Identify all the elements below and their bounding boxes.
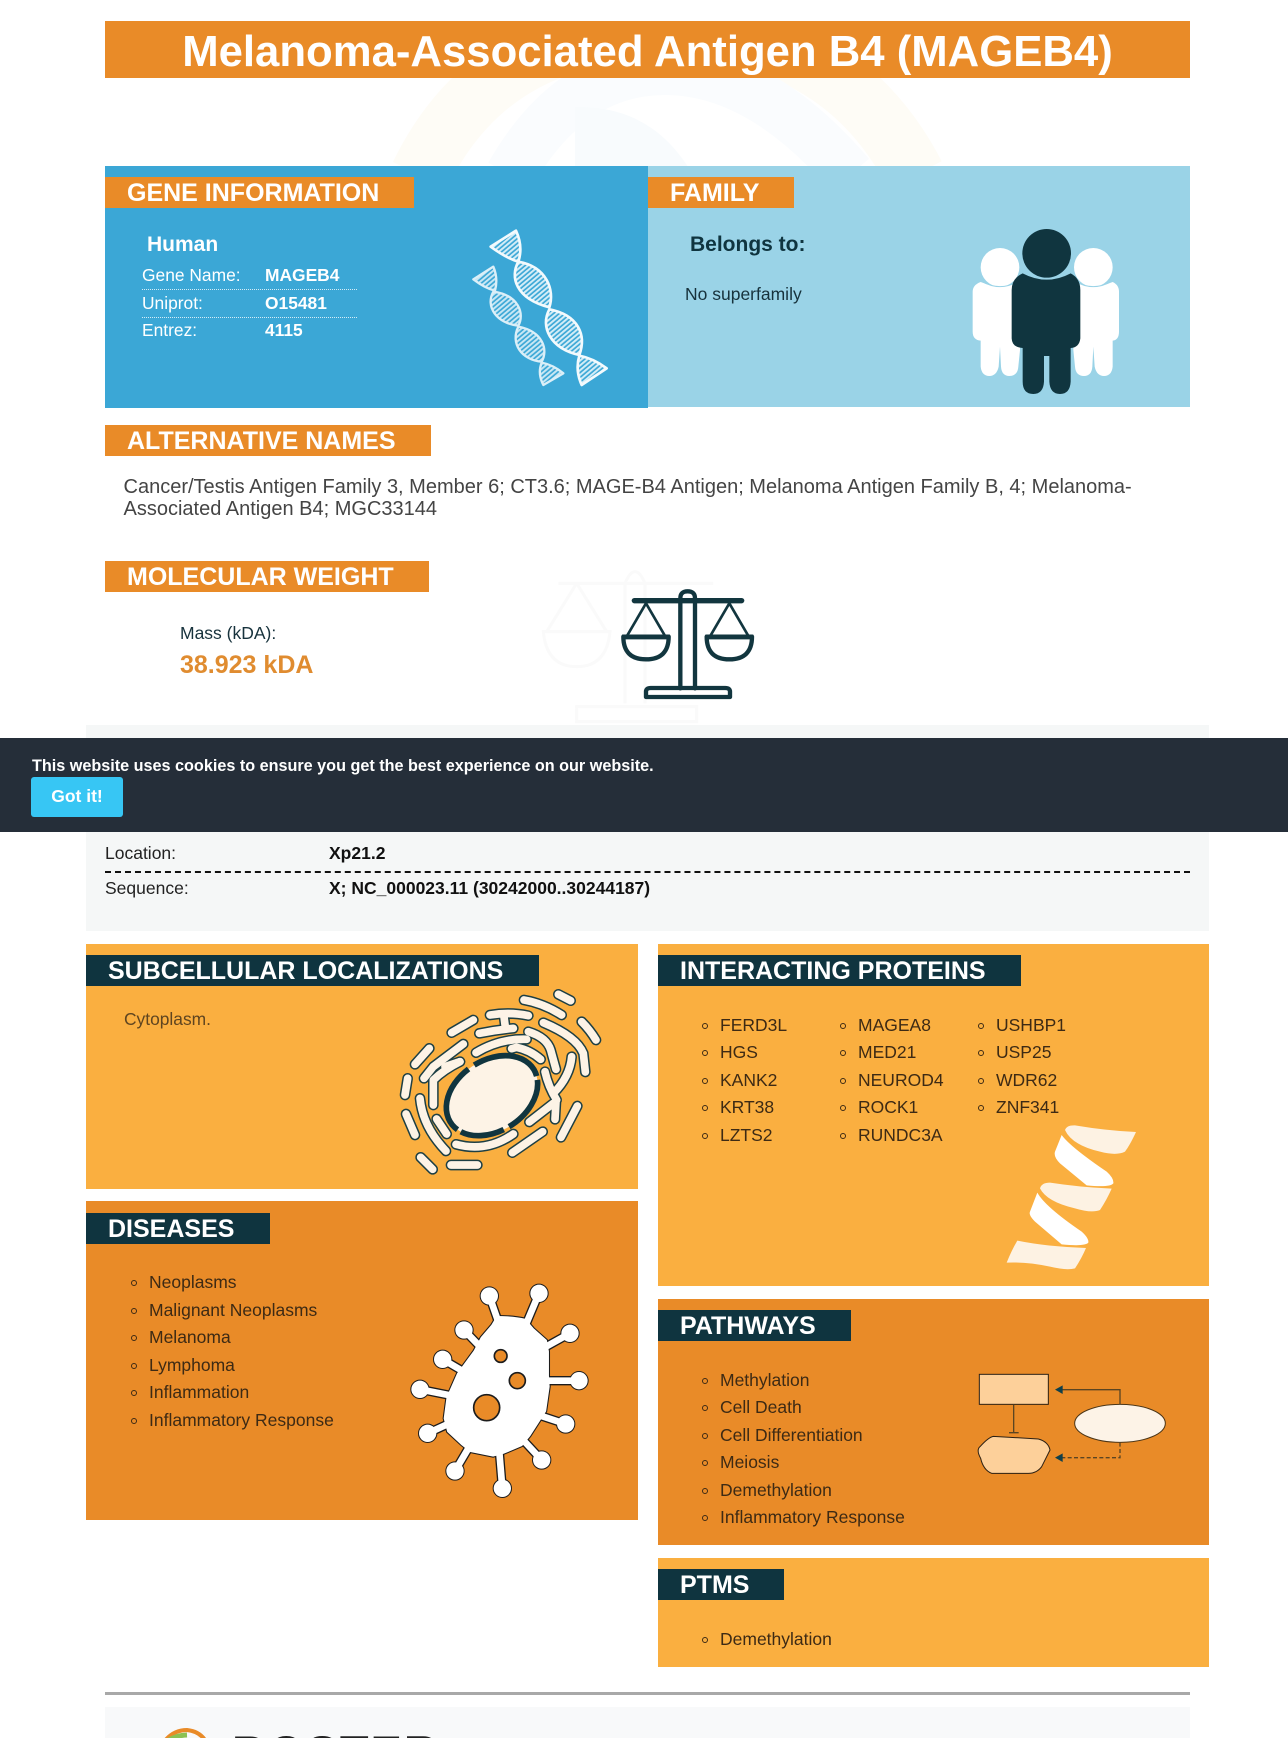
panel: gene information [105,166,648,408]
panel: interacting proteins [658,944,1209,1286]
faint watermark scales [520,560,780,730]
heading: family: FAMILY [670,179,759,207]
list: proteins column 2 [840,1015,944,1145]
heading: ptms: PTMS [680,1571,749,1599]
list: proteins column 1 [702,1015,787,1145]
list: pathways: Cell Death [720,1397,802,1417]
sequence value: X; NC_000023.11 (30242000..30244187) [329,878,650,898]
list: ptms: Demethylation [720,1629,832,1649]
heading: diseases: DISEASES [108,1215,234,1243]
heading: interacting proteins: INTERACTING PROTEINS [680,957,986,985]
list: diseases: Malignant Neoplasms [149,1300,317,1320]
list: pathways: Meiosis [720,1452,779,1472]
icon: pathway diagram [978,1374,1166,1474]
list: proteins column 3: WDR62 [996,1070,1057,1090]
panel: footer [105,1707,1190,1738]
mass label: Mass (kDA): [180,623,276,643]
heading: gene information: GENE INFORMATION [127,179,379,207]
panel: pathways [658,1299,1209,1545]
entrez row [142,320,303,340]
species label: Human [147,233,218,256]
background watermark logo [394,78,941,166]
localization text: Cytoplasm. [124,1009,211,1029]
heading: pathways: PATHWAYS [680,1312,816,1340]
list: pathways: Demethylation [720,1480,832,1500]
title banner: Melanoma-Associated Antigen B4 (MAGEB4) [182,27,1113,76]
panel: diseases [86,1201,638,1520]
belongs to label: Belongs to: [690,233,806,256]
list: diseases: Inflammation [149,1382,249,1402]
panel: ptms [658,1558,1209,1667]
superfamily value: No superfamily [685,284,802,304]
list: proteins column 2: MAGEA8 [858,1015,931,1035]
list: proteins column 2: NEUROD4 [858,1070,944,1090]
panel: subcellular localizations [86,944,638,1189]
entrez row: Entrez: [142,320,197,340]
uniprot row: O15481 [265,293,327,313]
heading: molecular weight: MOLECULAR WEIGHT [127,563,394,591]
list: proteins column 3: USP25 [996,1042,1051,1062]
got it button: Got it! [51,786,103,806]
list: proteins column 2: MED21 [858,1042,916,1062]
heading: ptms [658,1569,784,1600]
heading: subcellular localizations: SUBCELLULAR LOCALIZATIONS [108,957,503,985]
list: proteins column 1: KANK2 [720,1070,777,1090]
cookie message: This website uses cookies to ensure you get the best experience on our website. [32,757,654,775]
uniprot row: Uniprot: [142,293,203,313]
list: pathways [702,1370,905,1527]
list: proteins column 3: ZNF341 [996,1097,1059,1117]
list: pathways: Inflammatory Response [720,1507,905,1527]
panel: family [648,166,1190,407]
list: diseases: Neoplasms [149,1272,237,1292]
list: proteins column 2: ROCK1 [858,1097,918,1117]
icon: people group [972,229,1119,394]
list: pathways: Cell Differentiation [720,1425,863,1445]
location value: Xp21.2 [329,843,385,863]
list: proteins column 1: KRT38 [720,1097,774,1117]
icon: dna helix [472,229,608,386]
list: proteins column 3: USHBP1 [996,1015,1066,1035]
panel: chromosome location [86,725,1209,931]
heading: pathways [658,1310,851,1341]
icon: footer logo [164,1728,206,1738]
uniprot row [142,291,357,318]
list: proteins column 1: LZTS2 [720,1125,773,1145]
icon: protein helix ribbon [1006,1125,1136,1270]
mass value: 38.923 kDA [180,651,313,679]
heading: diseases [86,1213,270,1244]
heading: family [648,177,794,208]
location label: Location: [105,843,176,863]
list: diseases: Inflammatory Response [149,1410,334,1430]
cookie banner [0,738,1288,832]
list: proteins column 1: HGS [720,1042,758,1062]
list: proteins column 3 [978,1015,1066,1117]
gene name row: Gene Name: [142,265,241,285]
got it button [31,777,123,817]
list: proteins column 1: FERD3L [720,1015,787,1035]
heading: alternative names: ALTERNATIVE NAMES [127,427,396,455]
list: proteins column 2: RUNDC3A [858,1125,943,1145]
alternative names text: Cancer/Testis Antigen Family 3, Member 6; CT3.6; MAGE-B4 Antigen; Melanoma Antigen Family B, 4; Melanoma-Associated Antigen B4; MGC33144 [124,476,1132,520]
list: diseases: Lymphoma [149,1355,235,1375]
gene name row: MAGEB4 [265,265,339,285]
list: diseases: Melanoma [149,1327,231,1347]
gene name row [142,263,357,290]
entrez row: 4115 [265,320,303,340]
list: diseases [131,1272,334,1430]
icon: balance scales [621,589,754,700]
sequence label: Sequence: [105,878,189,898]
icon: virus [410,1284,589,1498]
list: pathways: Methylation [720,1370,810,1390]
icon: cell organelles [400,989,602,1175]
